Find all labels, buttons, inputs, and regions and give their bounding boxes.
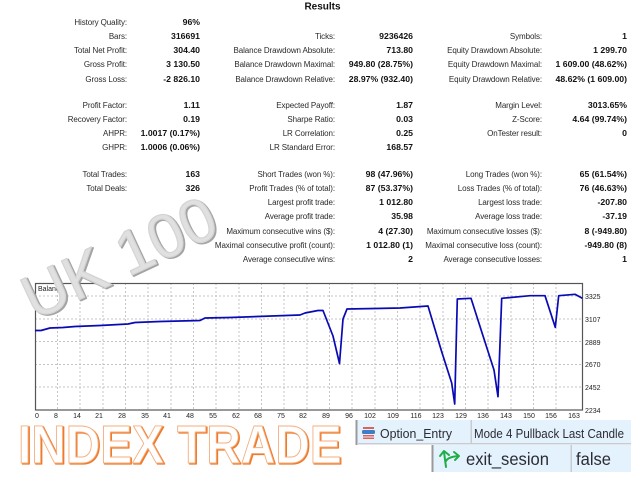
statistics column 3: Equity Drawdown Maximal: <box>448 60 542 69</box>
statistics column 1: 304.40 <box>173 45 200 55</box>
statistics column 1: 1.11 <box>184 100 200 110</box>
UK 100 watermark: UK 100 <box>11 183 228 333</box>
statistics column 1 <box>68 17 200 193</box>
statistics column 2: 1.87 <box>396 100 413 110</box>
statistics column 3: 4.64 (99.74%) <box>572 114 627 124</box>
statistics column 3: 48.62% (1 609.00) <box>556 74 627 84</box>
statistics column 3 <box>425 31 627 264</box>
y axis labels: 2670 <box>585 362 601 369</box>
statistics column 2: Maximum consecutive wins ($): <box>226 227 335 236</box>
statistics column 2: 4 (27.30) <box>378 226 413 236</box>
setting row: Option_Entry <box>356 420 631 445</box>
statistics column 3: Equity Drawdown Absolute: <box>447 46 542 55</box>
statistics column 2: 0.25 <box>396 128 413 138</box>
statistics column 2: 168.57 <box>386 142 413 152</box>
statistics column 2: 98 (47.96%) <box>366 169 413 179</box>
statistics column 3: 65 (61.54%) <box>580 169 627 179</box>
statistics column 2: Largest profit trade: <box>268 198 335 207</box>
statistics column 2: 9236426 <box>379 31 413 41</box>
statistics column 1: 316691 <box>171 31 200 41</box>
x axis labels: 163 <box>568 413 580 420</box>
statistics column 2: Balance Drawdown Absolute: <box>234 46 335 55</box>
x axis labels: 109 <box>387 413 399 420</box>
statistics column 2: Expected Payoff: <box>276 101 335 110</box>
statistics column 1: 1.0006 (0.06%) <box>141 142 200 152</box>
statistics column 3: Largest loss trade: <box>478 198 542 207</box>
statistics column 2: 713.80 <box>386 45 413 55</box>
statistics column 3: Symbols: <box>510 32 542 41</box>
statistics column 3: Loss Trades (% of total): <box>458 184 542 193</box>
statistics column 2: Maximal consecutive profit (count): <box>215 241 335 250</box>
statistics column 2: Sharpe Ratio: <box>287 115 335 124</box>
x axis labels: 102 <box>364 413 376 420</box>
statistics column 3: OnTester result: <box>487 129 542 138</box>
statistics column 1: 326 <box>186 183 200 193</box>
x axis labels: 156 <box>545 413 557 420</box>
x axis labels: 55 <box>209 413 217 420</box>
statistics column 3: 76 (46.63%) <box>580 183 627 193</box>
statistics column 3: Z-Score: <box>512 115 542 124</box>
x axis labels <box>35 413 580 420</box>
statistics column 2: 2 <box>408 254 413 264</box>
statistics column 3: Average consecutive losses: <box>443 255 542 264</box>
x axis labels: 21 <box>95 413 103 420</box>
statistics column 2: Balance Drawdown Relative: <box>235 75 335 84</box>
x axis labels: 82 <box>299 413 307 420</box>
statistics column 1: Gross Profit: <box>84 60 127 69</box>
statistics column 1: Profit Factor: <box>83 101 127 110</box>
statistics column 2: 949.80 (28.75%) <box>349 59 413 69</box>
statistics column 1: 163 <box>186 169 200 179</box>
statistics column 2: 1 012.80 (1) <box>366 240 413 250</box>
statistics column 1: AHPR: <box>103 129 127 138</box>
statistics column 1: Gross Loss: <box>85 75 127 84</box>
label: Option_Entry: Option_Entry <box>380 426 452 441</box>
value: false: false <box>576 449 611 469</box>
statistics column 3: Equity Drawdown Relative: <box>449 75 542 84</box>
statistics column 1: 0.19 <box>183 114 200 124</box>
x axis labels: 75 <box>277 413 285 420</box>
statistics column 1: GHPR: <box>102 143 127 152</box>
icon: green branching arrow <box>440 451 459 467</box>
statistics column 1: Total Net Profit: <box>74 46 127 55</box>
statistics column 1: -2 826.10 <box>163 74 200 84</box>
statistics column 3: -207.80 <box>598 197 627 207</box>
statistics column 1: 1.0017 (0.17%) <box>141 128 200 138</box>
statistics column 3: -949.80 (8) <box>584 240 627 250</box>
INDEX TRADE heading: INDEX TRADE <box>18 414 342 475</box>
statistics column 2: 0.03 <box>396 114 413 124</box>
statistics column 2: LR Standard Error: <box>270 143 335 152</box>
x axis labels: 96 <box>345 413 353 420</box>
statistics column 1: History Quality: <box>74 18 127 27</box>
setting row: exit_sesion <box>432 445 631 472</box>
statistics column 1: Bars: <box>109 32 127 41</box>
label: exit_sesion: exit_sesion <box>466 449 549 470</box>
statistics column 1: Total Deals: <box>86 184 127 193</box>
statistics column 3: 8 (-949.80) <box>584 226 627 236</box>
statistics column 2: 1 012.80 <box>379 197 413 207</box>
statistics column 2: Ticks: <box>315 32 335 41</box>
UK 100 watermark: UK 100 <box>13 184 229 334</box>
x axis labels: 150 <box>523 413 535 420</box>
title: Results <box>304 2 341 12</box>
statistics column 2: Balance Drawdown Maximal: <box>234 60 335 69</box>
statistics column 3: -37.19 <box>602 211 627 221</box>
statistics column 3: Maximum consecutive losses ($): <box>427 227 542 236</box>
statistics column 3: Margin Level: <box>495 101 542 110</box>
x axis labels: 14 <box>73 413 81 420</box>
x axis labels: 8 <box>54 413 58 420</box>
x axis labels: 129 <box>455 413 467 420</box>
statistics column 2: 35.98 <box>391 211 413 221</box>
balance line chart <box>35 283 601 420</box>
statistics column 3: 1 <box>622 31 627 41</box>
statistics column 1: Total Trades: <box>82 170 127 179</box>
statistics column 2: Average profit trade: <box>265 212 335 221</box>
x axis labels: 143 <box>500 413 512 420</box>
statistics column 3: Average loss trade: <box>475 212 542 221</box>
y axis labels: 3107 <box>585 317 601 324</box>
statistics column 3: 0 <box>622 128 627 138</box>
x axis labels: 41 <box>163 413 171 420</box>
balance label: Balance <box>38 286 63 293</box>
y axis labels: 3325 <box>585 294 601 301</box>
x axis labels: 123 <box>432 413 444 420</box>
x axis labels: 68 <box>254 413 262 420</box>
statistics column 2: Short Trades (won %): <box>258 170 335 179</box>
statistics column 2: 28.97% (932.40) <box>349 74 413 84</box>
x axis labels: 0 <box>35 413 39 420</box>
x axis labels: 116 <box>410 413 422 420</box>
value: Mode 4 Pullback Last Candle: Mode 4 Pullback Last Candle <box>474 427 624 441</box>
x axis labels: 48 <box>186 413 194 420</box>
INDEX TRADE heading: INDEX TRADE <box>19 416 343 476</box>
statistics column 2: Average consecutive wins: <box>243 255 335 264</box>
statistics column 3: 3013.65% <box>588 100 627 110</box>
icon: enum drum <box>362 427 375 439</box>
statistics column 3: 1 299.70 <box>593 45 627 55</box>
x axis labels: 136 <box>477 413 489 420</box>
y axis labels: 2452 <box>585 385 601 392</box>
balance curve <box>35 294 582 404</box>
x axis labels: 89 <box>322 413 330 420</box>
y axis labels: 2889 <box>585 340 601 347</box>
y axis labels: 2234 <box>585 408 601 415</box>
statistics column 3: 1 <box>622 254 627 264</box>
x axis labels: 62 <box>232 413 240 420</box>
x axis labels: 35 <box>141 413 149 420</box>
statistics column 3: 1 609.00 (48.62%) <box>556 59 627 69</box>
y axis labels <box>585 294 601 415</box>
statistics column 2: LR Correlation: <box>283 129 335 138</box>
statistics column 3: Long Trades (won %): <box>466 170 542 179</box>
statistics column 3: Maximal consecutive loss (count): <box>425 241 542 250</box>
statistics column 1: 96% <box>183 17 200 27</box>
x axis labels: 28 <box>118 413 126 420</box>
statistics column 1: 3 130.50 <box>166 59 200 69</box>
statistics column 2: Profit Trades (% of total): <box>249 184 335 193</box>
statistics column 2: 87 (53.37%) <box>366 183 413 193</box>
statistics column 1: Recovery Factor: <box>68 115 127 124</box>
statistics column 2 <box>215 31 413 264</box>
